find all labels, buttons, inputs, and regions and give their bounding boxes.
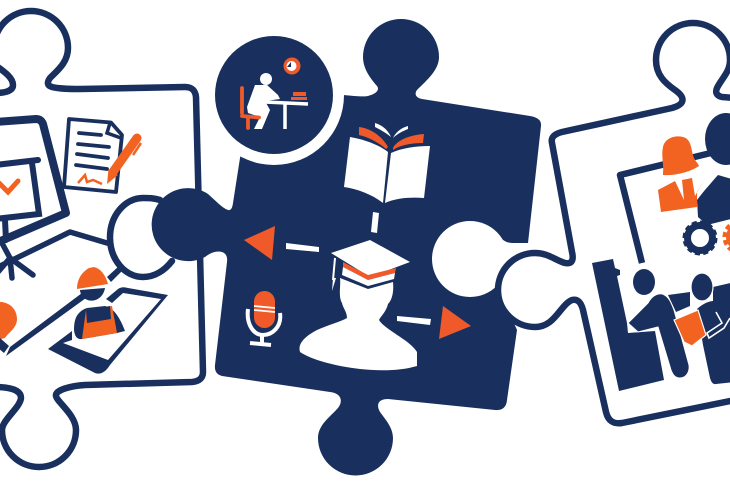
icon: light bulb and pen stroke xyxy=(0,266,123,356)
icon: orange gear xyxy=(724,222,730,252)
clock xyxy=(284,58,300,74)
right piece outline xyxy=(498,23,730,423)
icon: orange pen xyxy=(107,138,141,184)
arrow: left orange xyxy=(244,226,319,260)
icon: person studying badge xyxy=(204,25,344,165)
left piece outline xyxy=(0,11,203,467)
icon: construction worker xyxy=(74,267,125,339)
student xyxy=(260,73,272,85)
icon: book xyxy=(344,123,430,203)
signature xyxy=(78,175,102,184)
panel: right puzzle piece xyxy=(498,23,730,423)
arrow: book to graduate xyxy=(371,212,379,233)
icon: navy gear xyxy=(684,222,716,254)
panel: left puzzle piece xyxy=(0,11,203,467)
socket hole xyxy=(432,221,508,297)
person two xyxy=(691,273,713,301)
icon: navy shield xyxy=(697,175,730,225)
icon: door and desk xyxy=(592,259,664,391)
icon: tablet xyxy=(48,287,168,374)
icon: graduate xyxy=(300,240,417,370)
panel: centre puzzle piece xyxy=(152,19,541,476)
icon: orange woman xyxy=(658,136,705,212)
arrow: right orange xyxy=(397,306,471,339)
icon: man head xyxy=(705,113,730,165)
icon: microphone xyxy=(248,291,280,345)
icon: signed document xyxy=(64,119,141,192)
icon: meeting people xyxy=(628,269,730,384)
person one xyxy=(633,269,655,295)
icon: presentation screen and tablet frame xyxy=(0,119,107,278)
picture frame xyxy=(620,152,715,263)
navy band xyxy=(668,282,730,312)
